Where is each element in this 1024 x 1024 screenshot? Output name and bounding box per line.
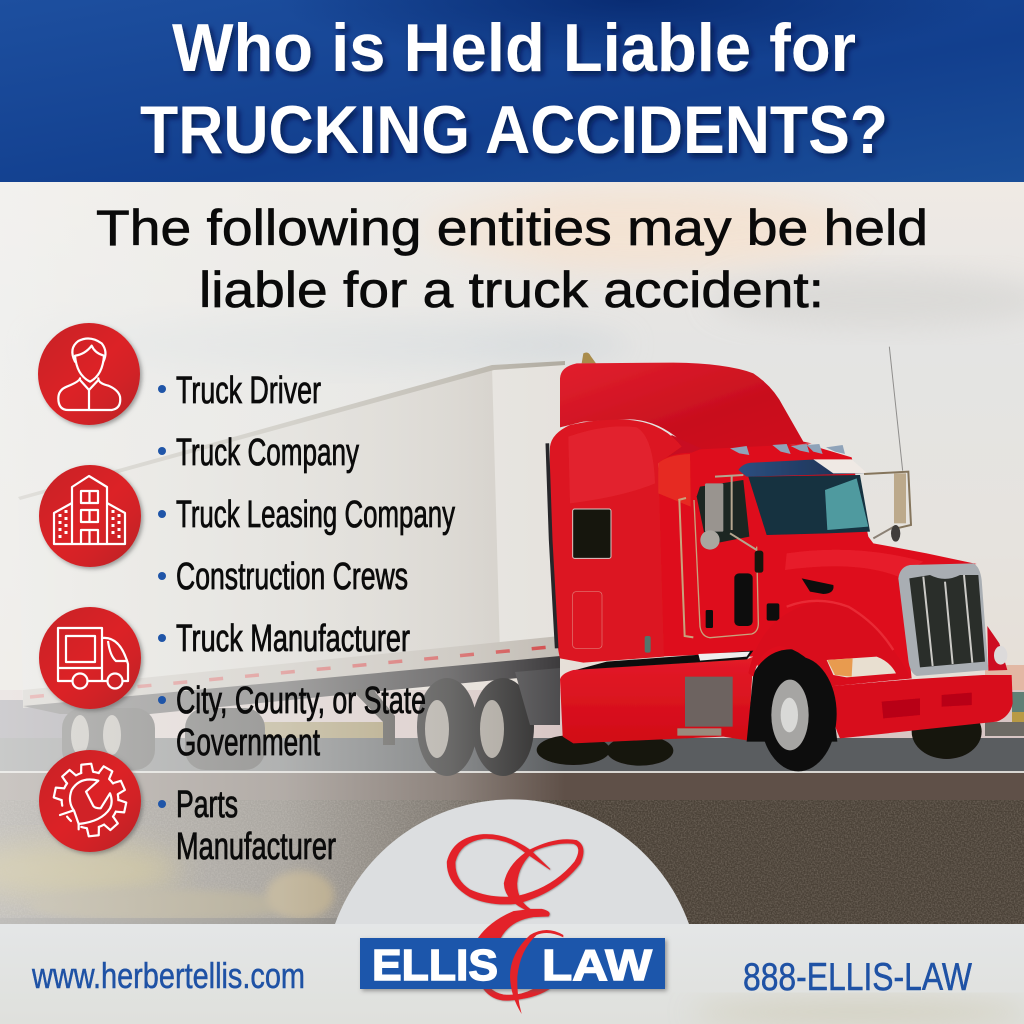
website: www.herbertellis.com [31, 955, 305, 996]
subtitle: liable for a truck accident: [199, 262, 824, 318]
hood highlights [785, 550, 923, 577]
logo: Ellis Law [360, 835, 665, 1014]
subtitle [96, 200, 928, 318]
sleeper hatch [573, 592, 602, 648]
top banner [0, 0, 1024, 182]
sleeper window [573, 509, 611, 558]
title text [140, 10, 888, 168]
logo: firm name [372, 941, 653, 990]
photo: red truck cab [537, 347, 1013, 771]
sleeper [549, 420, 682, 663]
door lower window and handle [706, 573, 834, 628]
photo: trailer of the truck [18, 361, 566, 776]
list of liable entities: Manufacturer [176, 826, 336, 868]
sun visor [738, 459, 867, 477]
list of liable entities: Construction Crews [176, 556, 408, 598]
icon: company building [39, 465, 141, 567]
dark undercarriage band [573, 651, 753, 671]
list of liable entities: Truck Driver [176, 370, 321, 412]
list of liable entities: Truck Leasing Company [176, 494, 455, 536]
icon: truck driver [38, 323, 140, 425]
icon: gear and wrench [39, 750, 141, 852]
logo: firm name: LAW [542, 941, 653, 990]
list of liable entities: Parts [176, 784, 238, 826]
side fairing and tank [560, 657, 753, 743]
list of liable entities: Government [176, 722, 320, 764]
icon: truck [39, 607, 141, 709]
subtitle: The following entities may be held [96, 200, 928, 256]
logo: blue plate [360, 938, 665, 989]
side mirrors [700, 472, 911, 573]
front fender [748, 602, 912, 687]
logo: firm name: ELLIS [372, 941, 498, 990]
cab and hood body [658, 444, 977, 733]
footer band with dome [0, 799, 1024, 1024]
antenna and horn [582, 347, 903, 471]
bumper [827, 675, 1013, 738]
list of liable entities: Truck Company [176, 432, 359, 474]
list of liable entities: Truck Manufacturer [176, 618, 410, 660]
grab rail and door outline [678, 498, 758, 638]
background photo: sky, road and grass [0, 182, 1024, 924]
door window [697, 480, 749, 545]
logo: script E upper part [447, 835, 583, 1000]
chrome grille [898, 563, 988, 676]
list of liable entities [158, 370, 455, 868]
title text: Who is Held Liable for [172, 10, 856, 86]
title text: TRUCKING ACCIDENTS? [140, 92, 888, 168]
rear tyres under the cab [537, 704, 982, 766]
white fade overlay on the left of the photo [0, 182, 565, 924]
windshield [748, 475, 870, 535]
right fender and lamp [987, 626, 1007, 671]
list of liable entities: City, County, or State [176, 680, 426, 722]
marker lights [730, 444, 845, 455]
logo: script E front stroke [510, 930, 563, 1014]
headlamp [827, 657, 896, 677]
list bullets [158, 385, 166, 808]
wheel well [747, 649, 837, 742]
roof fairing [560, 363, 812, 452]
front wheel [760, 657, 837, 771]
phone number: 888-ELLIS-LAW [743, 956, 972, 999]
trailer gap edge [547, 443, 557, 648]
